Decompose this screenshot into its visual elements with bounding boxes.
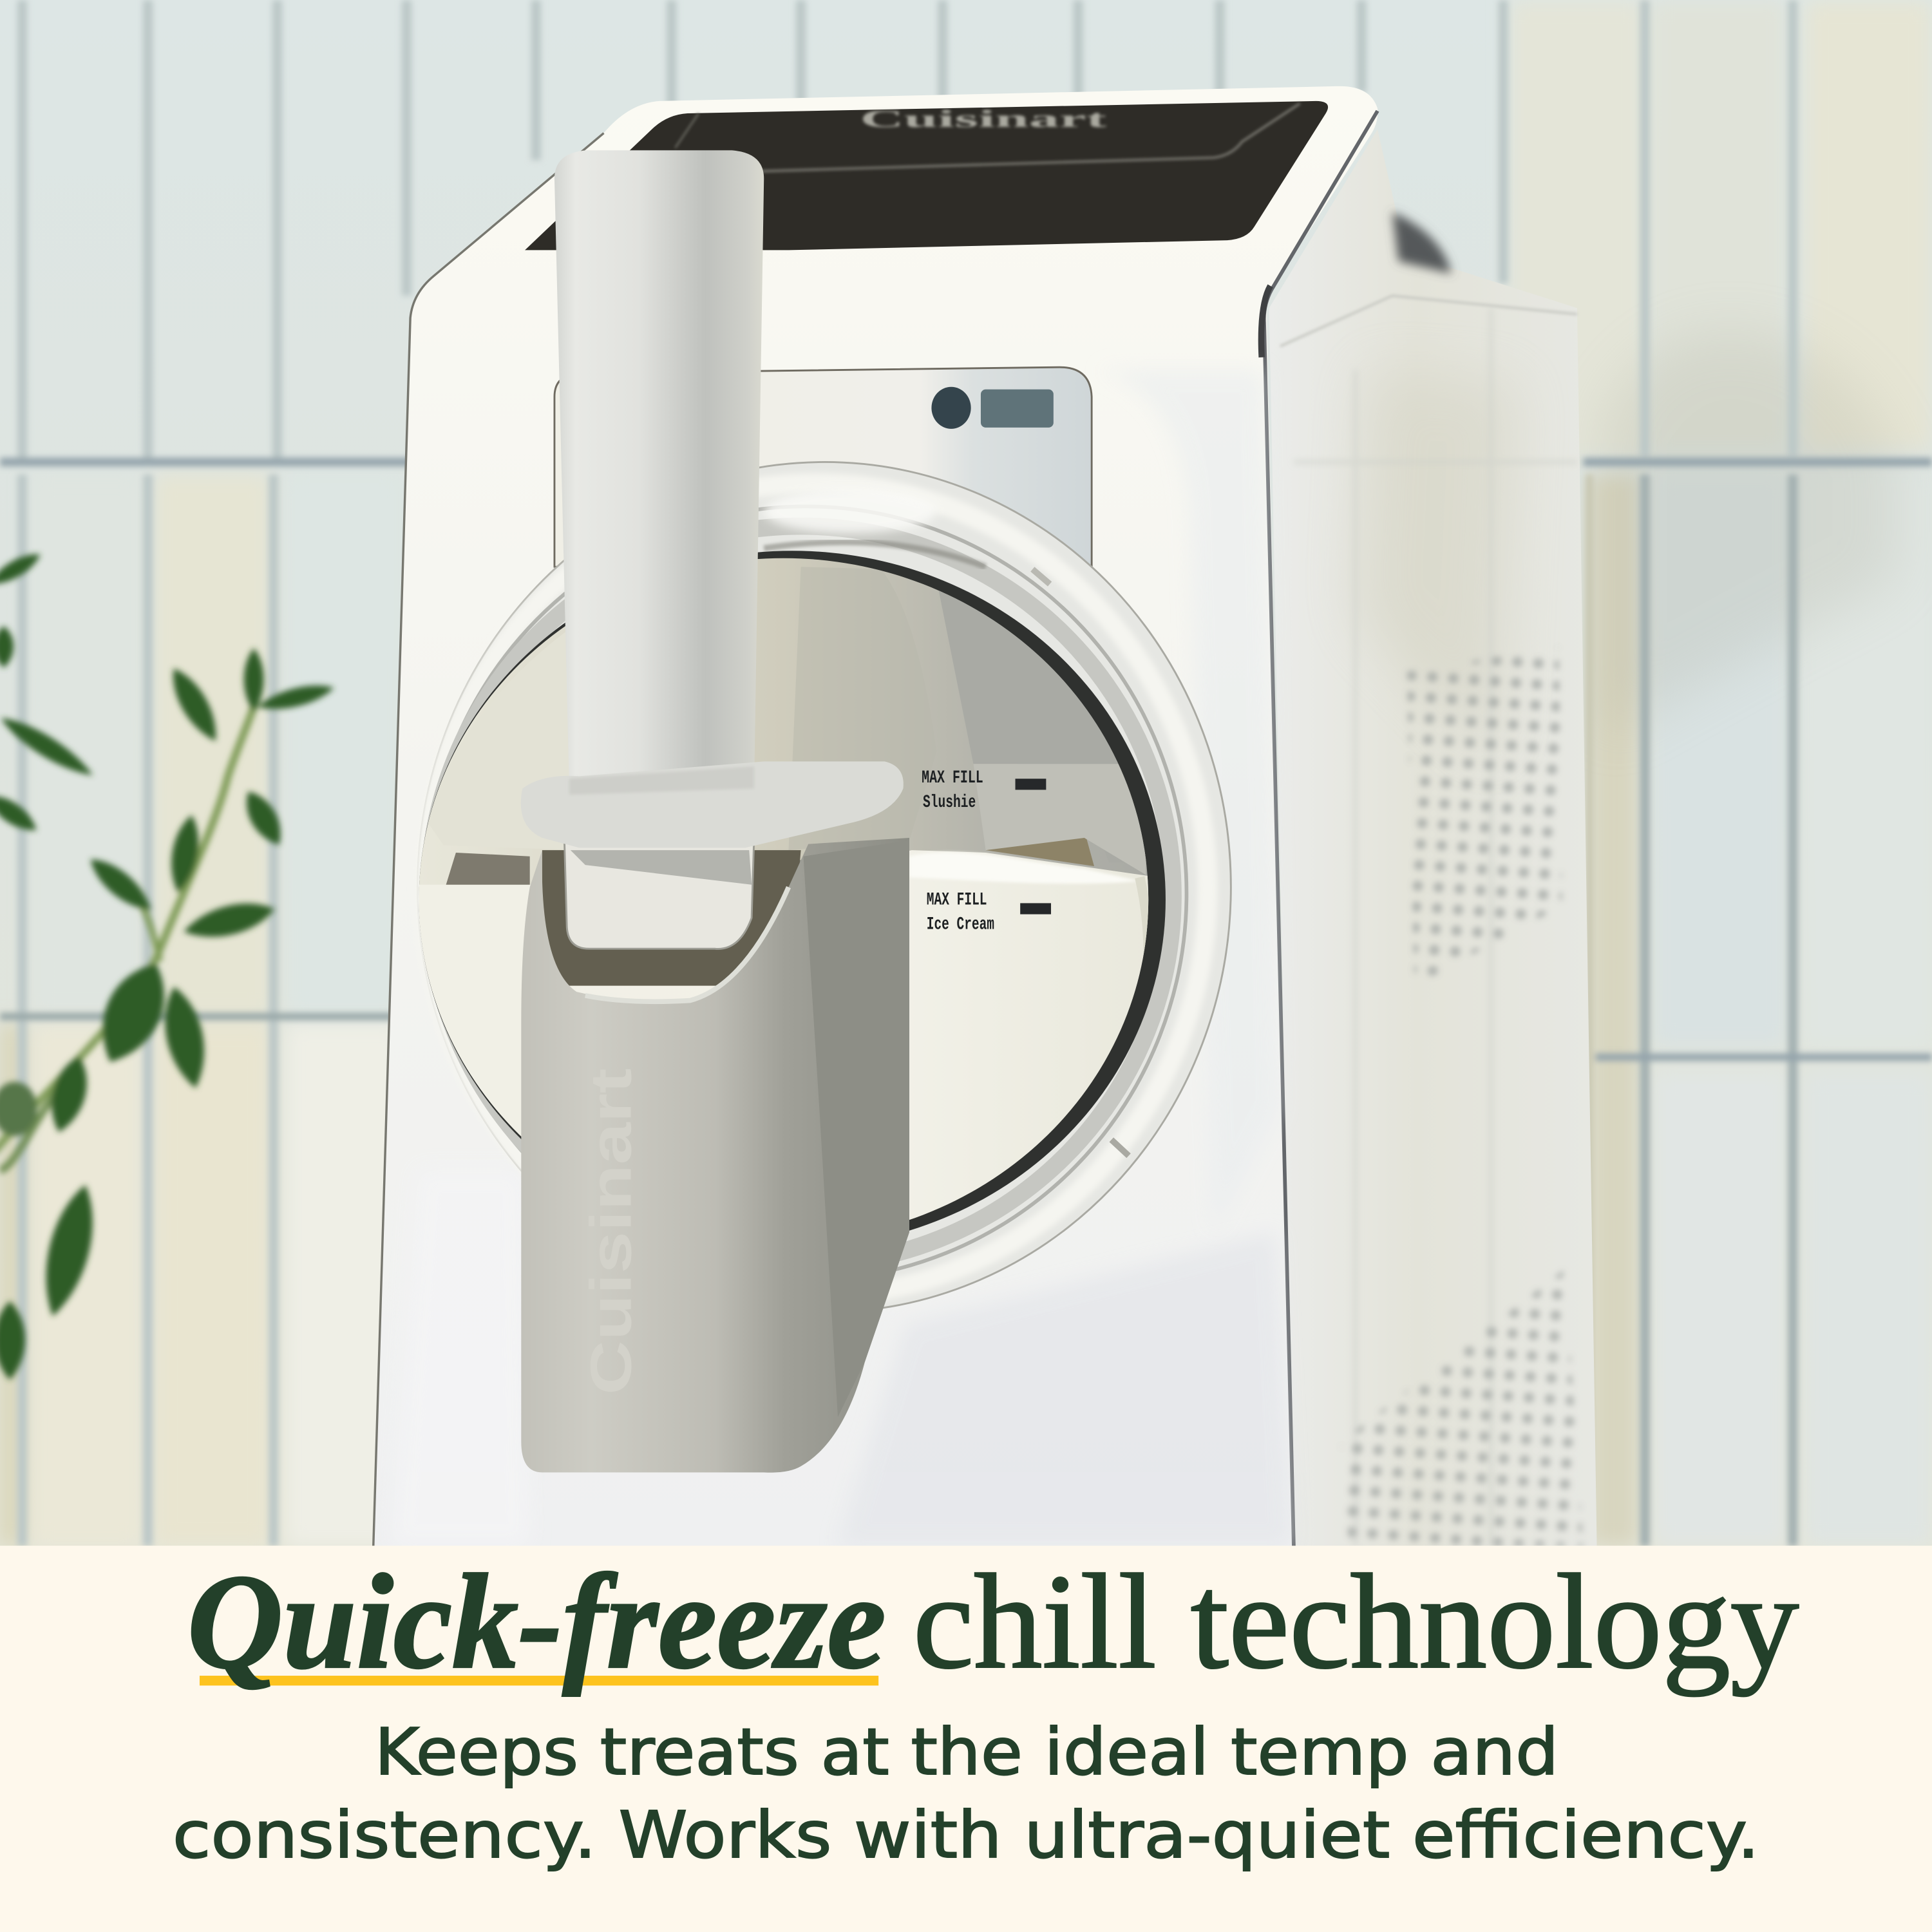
machine front body <box>374 86 1378 1546</box>
label max fill ice cream: MAX FILL <box>927 890 987 910</box>
body text: Keeps treats at the ideal temp and <box>375 1716 1558 1790</box>
control panel <box>525 101 1328 250</box>
dispenser handle <box>521 150 904 885</box>
heading <box>187 1546 1799 1697</box>
heading: chill technology <box>913 1546 1799 1697</box>
label max fill ice cream <box>927 890 994 935</box>
dispenser opening <box>542 850 801 986</box>
paddle reflection <box>788 838 909 1238</box>
embossed brand on spout: Cuisinart <box>580 1068 644 1395</box>
body text <box>173 1716 1759 1873</box>
perforation grid lower <box>1341 1269 1584 1546</box>
yellow underline <box>200 1676 878 1685</box>
label max fill ice cream: Ice Cream <box>927 915 994 935</box>
perforation grid upper <box>1407 647 1562 986</box>
machine side panel <box>1269 129 1597 1546</box>
label max fill slushie: Slushie <box>923 793 976 813</box>
bowl window <box>419 551 1166 1248</box>
caption panel <box>0 1546 1932 1932</box>
body text: consistency. Works with ultra-quiet efficiency. <box>173 1799 1759 1873</box>
brand on panel: Cuisinart <box>860 106 1107 133</box>
label max fill slushie <box>922 768 983 813</box>
dial <box>931 387 971 429</box>
milk fill <box>406 850 1158 1257</box>
dial plate <box>554 367 1092 569</box>
dispenser block <box>564 838 754 949</box>
fill marks <box>922 768 1051 935</box>
plant <box>0 547 336 1380</box>
bowl lid <box>406 462 1231 1312</box>
spout <box>521 838 909 1473</box>
heading: Quick-freeze <box>187 1546 886 1697</box>
display <box>981 390 1054 428</box>
label max fill slushie: MAX FILL <box>922 768 983 788</box>
